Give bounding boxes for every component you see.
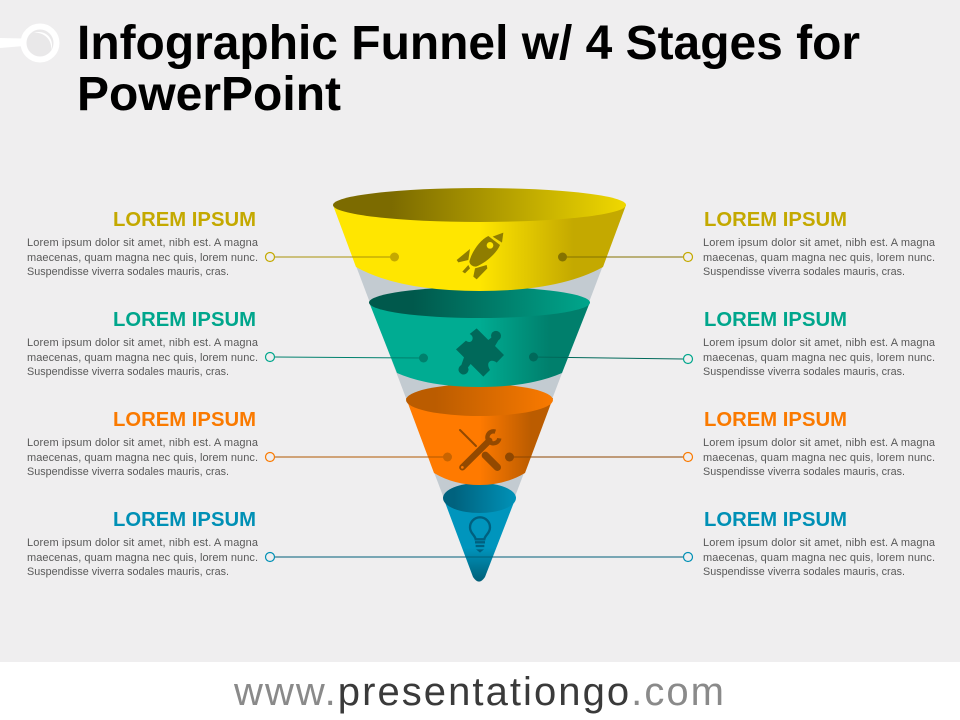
right row 2: Suspendisse viverra sodales mauris, cras. bbox=[703, 366, 905, 378]
left row 1: maecenas, quam magna nec quis, lorem nunc. bbox=[27, 252, 258, 264]
left row 3: maecenas, quam magna nec quis, lorem nunc. bbox=[27, 452, 258, 464]
title second line: PowerPoint bbox=[77, 68, 341, 121]
left row 2 bbox=[27, 308, 259, 378]
left row 4: maecenas, quam magna nec quis, lorem nunc. bbox=[27, 552, 258, 564]
left row 4: LOREM IPSUM bbox=[113, 508, 256, 531]
left row 4: Lorem ipsum dolor sit amet, nibh est. A magna bbox=[27, 537, 259, 549]
left row 1: LOREM IPSUM bbox=[113, 208, 256, 231]
left row 1: Lorem ipsum dolor sit amet, nibh est. A magna bbox=[27, 237, 259, 249]
right row 1 bbox=[703, 208, 936, 278]
left row 2: Suspendisse viverra sodales mauris, cras. bbox=[27, 366, 229, 378]
left row 2: Lorem ipsum dolor sit amet, nibh est. A magna bbox=[27, 337, 259, 349]
right row 4: Suspendisse viverra sodales mauris, cras. bbox=[703, 566, 905, 578]
left row 1 bbox=[27, 208, 259, 278]
right row 1: maecenas, quam magna nec quis, lorem nunc. bbox=[703, 252, 935, 264]
left row 4 bbox=[27, 508, 259, 578]
funnel stage 3: orange bbox=[406, 384, 553, 485]
right row 3: Suspendisse viverra sodales mauris, cras. bbox=[703, 466, 905, 478]
right row 4: Lorem ipsum dolor sit amet, nibh est. A magna bbox=[703, 537, 936, 549]
right row 4: maecenas, quam magna nec quis, lorem nunc. bbox=[703, 552, 935, 564]
right row 2: LOREM IPSUM bbox=[704, 308, 847, 331]
left connector 3 bbox=[266, 452, 452, 462]
left row 1: Suspendisse viverra sodales mauris, cras. bbox=[27, 266, 229, 278]
right row 2: Lorem ipsum dolor sit amet, nibh est. A magna bbox=[703, 337, 936, 349]
left row 3: LOREM IPSUM bbox=[113, 408, 256, 431]
right row 4: LOREM IPSUM bbox=[704, 508, 847, 531]
right row 3: maecenas, quam magna nec quis, lorem nunc. bbox=[703, 452, 935, 464]
left row 3: Suspendisse viverra sodales mauris, cras. bbox=[27, 466, 229, 478]
title: Infographic Funnel w/ 4 Stages for bbox=[77, 17, 860, 70]
funnel back cone bbox=[333, 205, 626, 582]
funnel stage 4: blue bbox=[443, 483, 516, 582]
footer url: www.presentationgo.com bbox=[233, 670, 724, 714]
funnel stage 1: yellow bbox=[333, 188, 626, 291]
connector 4 bbox=[266, 552, 692, 562]
right row 3: LOREM IPSUM bbox=[704, 408, 847, 431]
icon: rocket bbox=[457, 233, 503, 279]
right row 3 bbox=[703, 408, 936, 478]
funnel stage 2: teal bbox=[369, 287, 590, 387]
left row 2: LOREM IPSUM bbox=[113, 308, 256, 331]
right connector 1 bbox=[558, 252, 692, 262]
right row 1: Suspendisse viverra sodales mauris, cras. bbox=[703, 266, 905, 278]
right row 1: LOREM IPSUM bbox=[704, 208, 847, 231]
icon: tools bbox=[460, 430, 499, 469]
right row 1: Lorem ipsum dolor sit amet, nibh est. A magna bbox=[703, 237, 936, 249]
right row 3: Lorem ipsum dolor sit amet, nibh est. A magna bbox=[703, 437, 936, 449]
icon: puzzle piece bbox=[456, 328, 504, 377]
right connector 2 bbox=[529, 352, 692, 364]
icon: light bulb bbox=[470, 517, 490, 553]
right connector 3 bbox=[505, 452, 692, 462]
left row 3: Lorem ipsum dolor sit amet, nibh est. A magna bbox=[27, 437, 259, 449]
left row 2: maecenas, quam magna nec quis, lorem nunc. bbox=[27, 352, 258, 364]
right row 2: maecenas, quam magna nec quis, lorem nunc. bbox=[703, 352, 935, 364]
footer band bbox=[0, 662, 960, 720]
title marker icon bbox=[0, 26, 56, 60]
right row 2 bbox=[703, 308, 936, 378]
left row 3 bbox=[27, 408, 259, 478]
right row 4 bbox=[703, 508, 936, 578]
left row 4: Suspendisse viverra sodales mauris, cras. bbox=[27, 566, 229, 578]
left connector 2 bbox=[266, 352, 428, 362]
left connector 1 bbox=[266, 252, 399, 262]
